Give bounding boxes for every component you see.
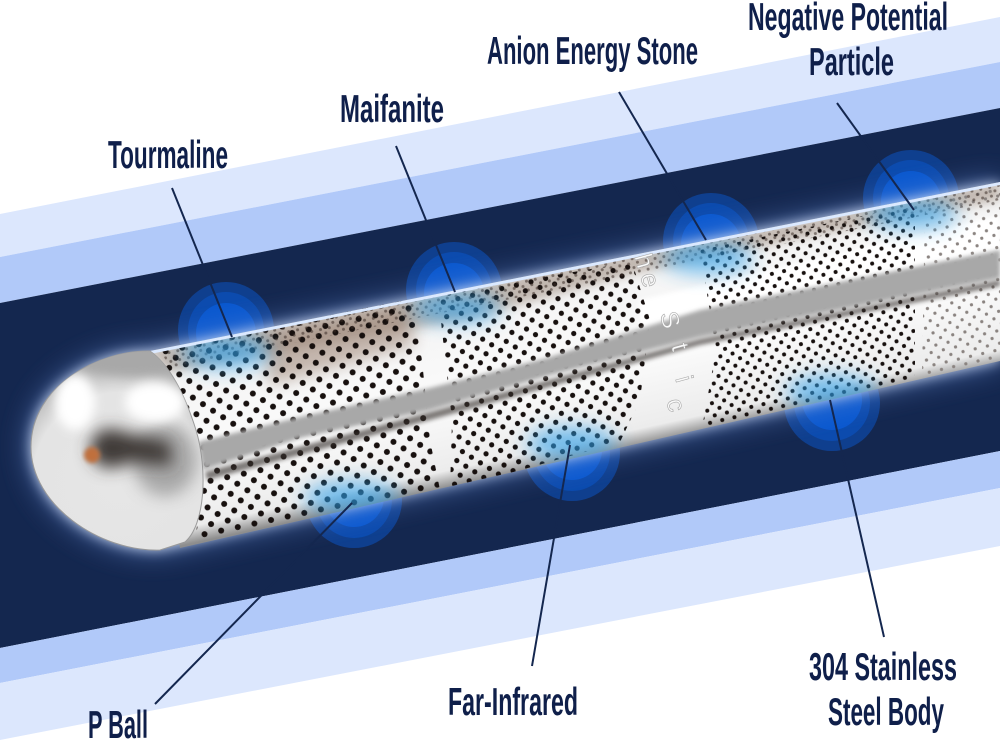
perforations segment 4 [922,186,1000,376]
cap reflection [84,447,100,463]
end cap [31,348,203,550]
perforations segment 2 [438,262,650,490]
tube glow [31,182,1000,550]
label: Negative Potential Particle: Particle [809,41,894,84]
perforations segment 1 [160,298,440,540]
cap highlights [55,374,95,430]
embossed lettering [634,252,694,412]
label: Tourmaline [108,134,232,337]
cap top shading [88,351,168,380]
blue circle markers [178,150,959,548]
upper medium band [0,62,1000,303]
label: P Ball [88,503,352,742]
lower medium band [0,451,1000,683]
label: Anion Energy Stone [487,30,706,240]
white highlight [644,219,998,308]
cap shadow [90,429,172,468]
perforations segment 3 [700,205,915,428]
label: Tourmaline: Tourmaline [108,134,228,177]
label: Maifanite: Maifanite [340,88,444,131]
embossed lettering: h [628,251,659,271]
top brown shading [150,182,1000,372]
cap side shading [133,424,197,496]
label: Maifanite [340,88,455,292]
embossed lettering: t [665,340,694,354]
brown mottling segment 1 [260,305,414,385]
embossed lettering: c [661,395,691,415]
navy background band [0,108,1000,648]
stick: perforated steel tube [31,170,1000,560]
label: Negative Potential Particle [748,0,948,210]
embossed lettering: e [634,270,665,290]
embossed lettering: S [654,308,685,332]
tube body [140,170,1000,560]
lower light band [0,488,1000,740]
upper light band [0,17,1000,257]
label: Far-Infrared [448,445,578,724]
label: 304 Stainless Steel Body [809,400,957,734]
blue reflections [181,200,957,514]
top perforated strip [160,182,1000,368]
embossed lettering: i [669,373,698,385]
label: Anion Energy Stone: Anion Energy Stone [487,30,698,73]
bright top edge [150,182,1000,354]
central grey band [198,250,1000,470]
label: Far-Infrared: Far-Infrared [448,681,578,724]
dark reflection line [205,280,1000,480]
